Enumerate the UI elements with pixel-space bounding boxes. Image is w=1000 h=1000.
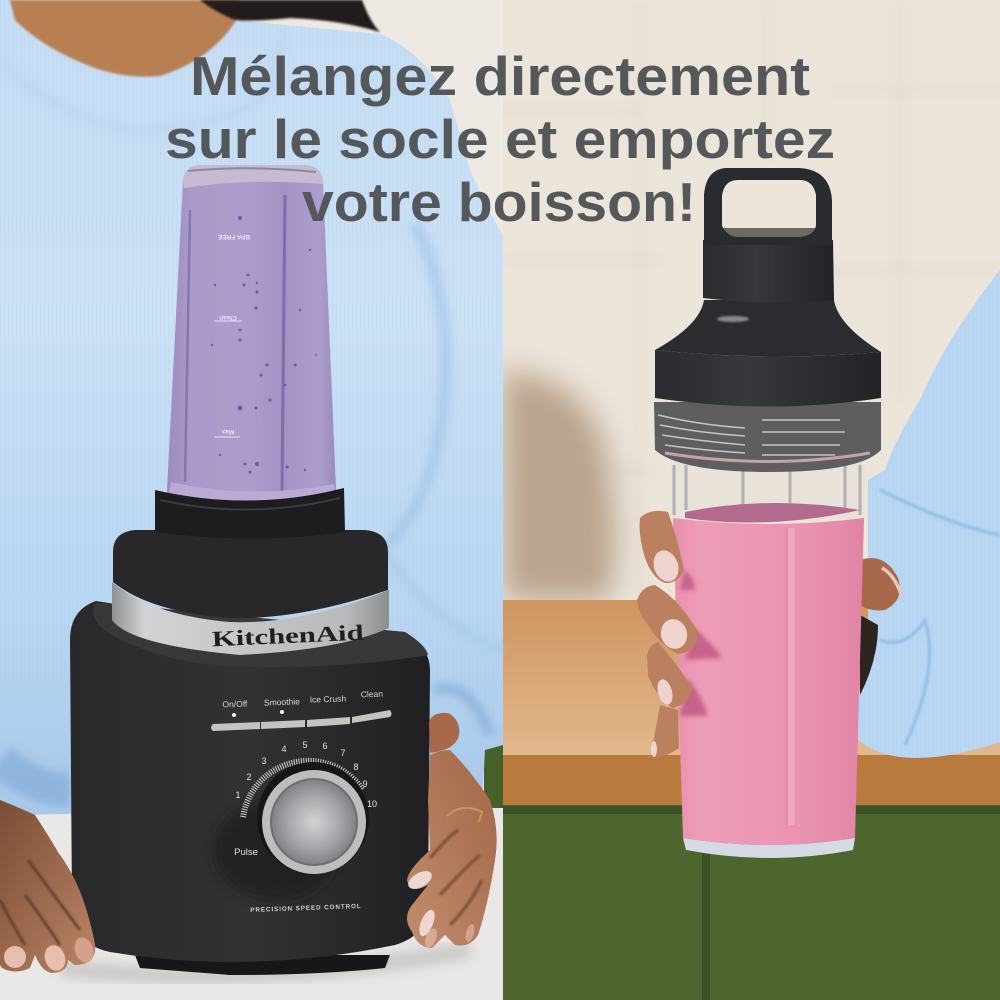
- panel: right sweater sleeve: [858, 270, 1000, 758]
- sweater: [0, 0, 503, 820]
- icon: blender jar with purple smoothie: Max: [221, 428, 234, 435]
- control buttons: [211, 710, 392, 731]
- bottle glass: [671, 462, 865, 518]
- brand logo: KitchenAid: [211, 620, 364, 651]
- speed numbers: Pulse: [234, 847, 258, 858]
- icon: blender jar with purple smoothie: BPA FREE: [217, 233, 250, 240]
- speed dial ticks: [243, 761, 363, 817]
- speed numbers: 5: [302, 740, 308, 750]
- pink smoothie: [673, 518, 864, 845]
- table: [0, 808, 503, 1000]
- icon: KitchenAid blender base: [70, 488, 430, 975]
- finger shadows: [680, 570, 722, 716]
- speed numbers: 7: [340, 748, 346, 758]
- dark collar: [113, 530, 388, 618]
- icon: left hand on blender: [0, 800, 97, 973]
- panel: right kitchen background: [503, 0, 1000, 1000]
- cap collar: [655, 350, 881, 406]
- dial ring: [257, 762, 369, 874]
- finger nails: [649, 547, 690, 757]
- speed numbers: 1: [235, 790, 241, 800]
- speed mode labels: On/Off: [222, 699, 248, 709]
- icon: blender jar with purple smoothie: Clean: [219, 314, 237, 321]
- speed mode labels: Ice Crush: [310, 693, 347, 705]
- neck: [10, 0, 240, 77]
- bottle handle: [704, 168, 832, 245]
- dial knob: [271, 779, 357, 865]
- icon: thumb behind bottle: [860, 558, 902, 610]
- handle base: [722, 228, 816, 245]
- speed mode labels: Clean: [361, 689, 383, 699]
- cap cone: [655, 300, 881, 357]
- icon: blender jar with purple smoothie: [167, 165, 336, 506]
- precision label: PRECISION SPEED CONTROL: [250, 903, 362, 914]
- bottle rib: [788, 528, 794, 825]
- speed mode labels: Smoothie: [264, 696, 300, 708]
- speed numbers: 9: [362, 779, 368, 789]
- status lights: [232, 710, 284, 717]
- speed dial shadow: [213, 800, 337, 900]
- speed numbers: 4: [281, 744, 287, 754]
- holding fingers: [637, 511, 698, 757]
- blender foot: [135, 955, 390, 975]
- speed numbers: [234, 740, 377, 858]
- speed numbers: 2: [246, 772, 252, 782]
- jar seat: [155, 488, 345, 538]
- speed mode labels: [222, 689, 383, 709]
- speed numbers: 3: [261, 756, 267, 766]
- icon: right hand on blender: [405, 713, 497, 949]
- title: votre boisson!: [302, 171, 696, 233]
- icon: travel bottle: [637, 168, 881, 858]
- blender body: [70, 601, 430, 962]
- speed numbers: 8: [353, 762, 359, 772]
- hair: [200, 0, 380, 32]
- cap neck: [703, 240, 834, 303]
- title: sur le socle et emportez: [165, 108, 835, 170]
- bottle base: [683, 838, 855, 858]
- speed numbers: 6: [322, 741, 328, 751]
- panel: left person and wall: [0, 0, 503, 1000]
- threaded clear collar: [654, 402, 881, 472]
- title: Mélangez directement: [190, 45, 810, 107]
- rounded top highlight: [93, 603, 428, 667]
- title: [165, 45, 835, 233]
- speed numbers: 10: [367, 799, 377, 809]
- silver branded band: [112, 582, 389, 655]
